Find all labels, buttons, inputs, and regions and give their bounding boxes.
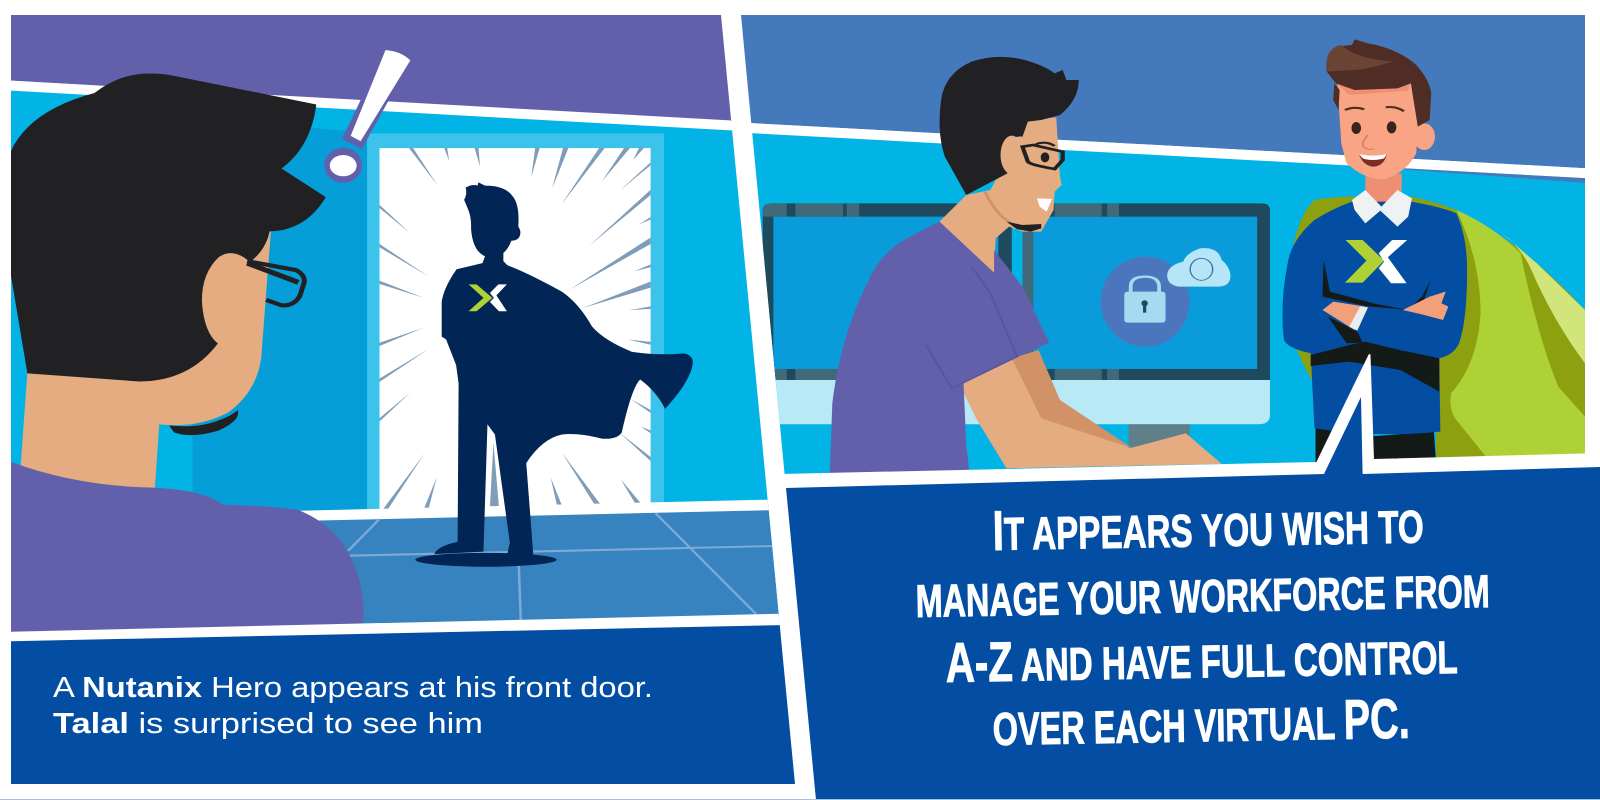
exclamation mark [324,50,410,183]
panel: speech bubble [786,397,1600,800]
thin blue accent under band [1347,165,1585,183]
hero face [1337,82,1418,179]
neck and face [20,231,271,488]
caption text: A Nutanix Hero appears at his front door. [53,672,653,704]
hair [940,57,1079,195]
character: Talal at computer [830,57,1222,477]
neck and face [939,117,1062,273]
neck shading [985,192,1012,223]
floor tile lines [348,513,780,620]
smile [1037,198,1052,212]
hero shadow [415,553,557,567]
room wall [0,90,800,640]
scene in zoom coordinates [763,39,1585,477]
hair [11,73,326,381]
white divider band [752,123,1585,168]
character: Talal from behind [0,73,364,653]
right monitor [1022,203,1270,380]
caption text [53,672,653,740]
door frame [367,133,664,513]
purple shirt [830,222,1049,477]
white strip above caption [11,614,782,642]
beard [169,410,238,435]
floor [318,510,779,624]
hero arm shadows [1322,260,1431,343]
inner arm shading [1012,350,1132,448]
ear [1001,136,1023,174]
arm [959,360,1222,468]
hero hair [1326,39,1431,127]
monitor stand [1129,424,1190,448]
sleeve fold [926,267,1017,388]
hero belt shadow [1311,342,1439,392]
hero hands [1322,292,1448,330]
room wall [752,133,1585,474]
goatee [1006,222,1041,232]
caption text: Talal is surprised to see him [53,708,483,740]
hero facial features [1345,107,1404,167]
icon: padlock badge [1101,257,1190,347]
hero cape [1286,197,1585,457]
white divider band [11,80,732,122]
panel: left comic panel [0,15,810,800]
left monitor [763,203,1012,380]
hero cuff [1349,307,1368,331]
hero ear [1414,123,1435,150]
white skirting strip [300,500,769,520]
top blue sky [730,15,1600,169]
monitor base [775,377,1270,424]
sky band: purple [0,15,760,124]
glasses [1022,143,1063,169]
hero collar [1352,190,1412,227]
hero sweater [1282,202,1467,434]
door opening with light [380,148,651,511]
speech text: OVER EACH VIRTUAL PC. [992,687,1410,757]
light rays [380,148,651,509]
icon: cloud sync [1167,248,1230,287]
white strip with speech tail [780,355,1600,500]
logo on sweater [1345,240,1407,283]
hero neck [1365,173,1402,208]
hero legs [1316,428,1436,463]
purple shirt [11,462,364,632]
ear [202,253,249,344]
panel: caption [11,625,795,784]
speech text: IT APPEARS YOU WISH TO [992,491,1424,562]
forehead shadow [1339,80,1411,95]
panel: right comic panel [730,15,1600,500]
speech text [915,491,1490,757]
bottom edge line [0,799,1600,800]
hero silhouette [434,182,693,555]
glasses [247,261,304,305]
darker wall section [192,118,371,518]
scene: door and hero in zoom coordinates [0,50,780,653]
logo on hero silhouette [469,284,507,311]
